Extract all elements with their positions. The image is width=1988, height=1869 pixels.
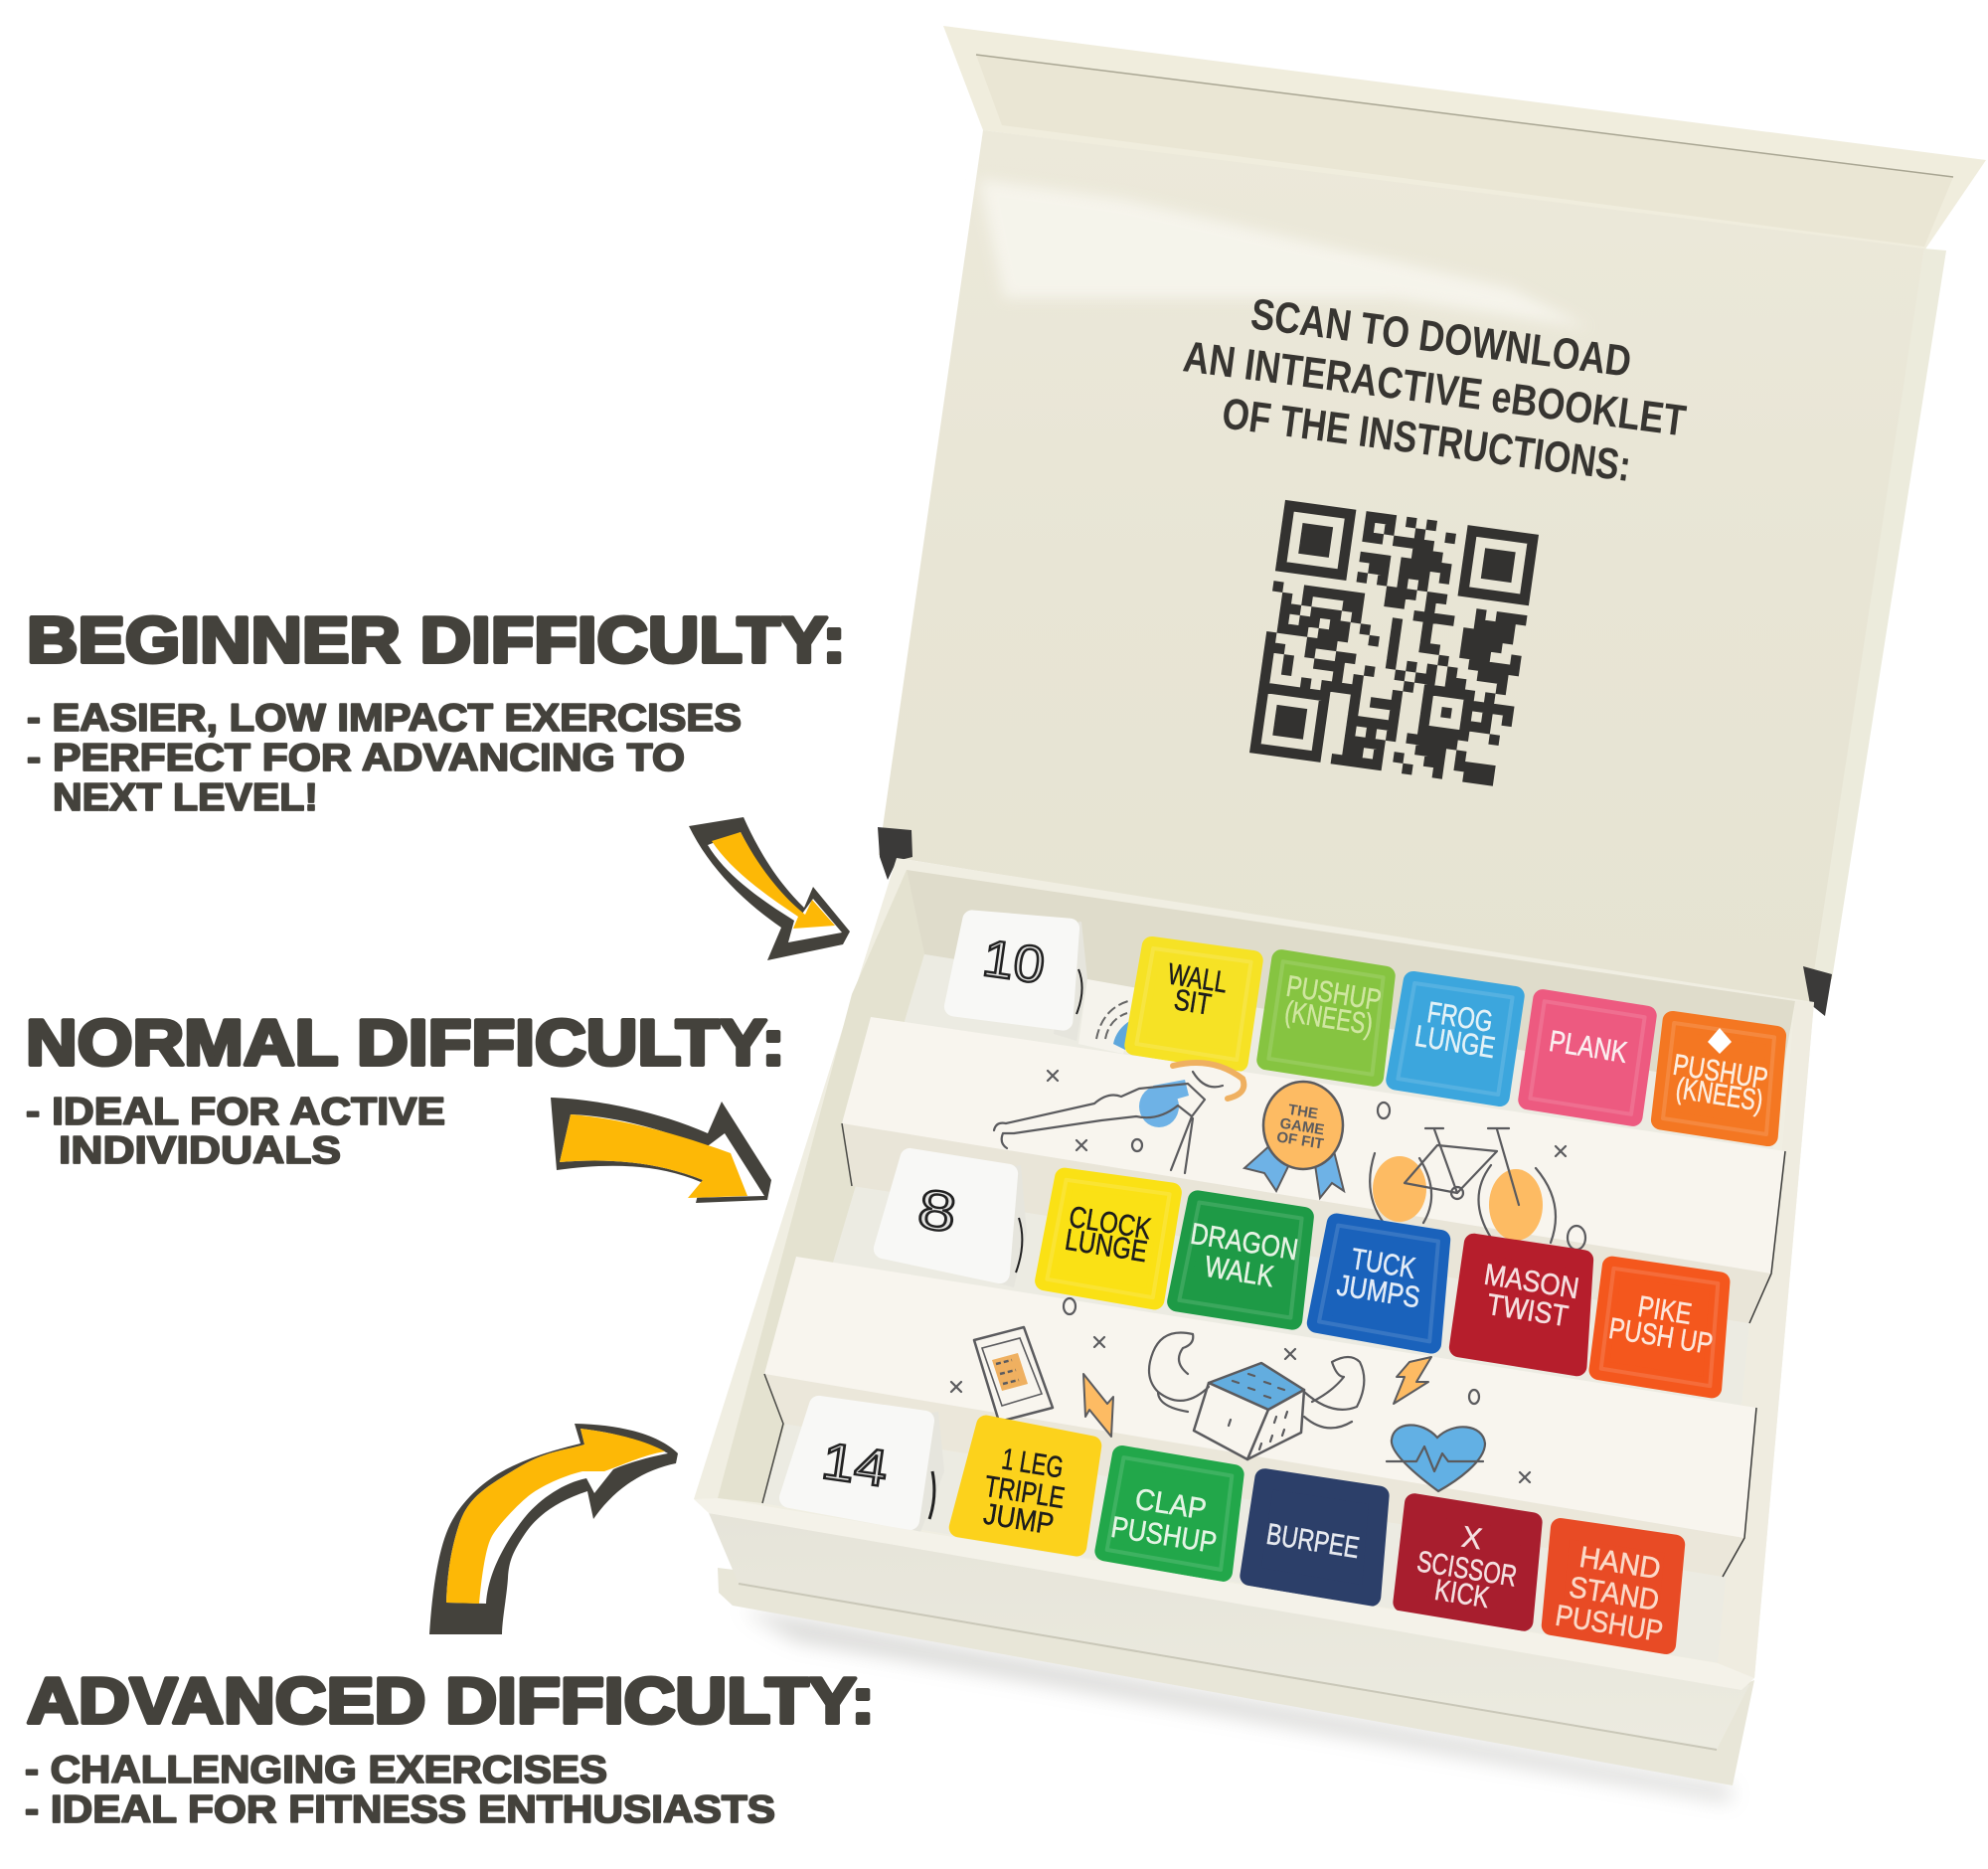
text block: beginner details [27,697,742,819]
lid right edge strip [1807,249,1946,979]
die: white 14: 14 [818,1433,892,1498]
die: 1 leg triple jump: 1 LEG [1000,1443,1066,1485]
die: clap pushup: CLAP [1133,1483,1209,1526]
die: x scissor kick: KICK [1432,1574,1492,1614]
die: 1 leg triple jump: TRIPLE [982,1470,1067,1515]
die: hand stand pushup: PUSHUP [1553,1600,1665,1648]
die: pushup knees green: (KNEES) [1282,995,1375,1042]
die: pushup knees orange: (KNEES) [1674,1072,1765,1118]
die: clock lunge: CLOCK [1067,1201,1153,1246]
icon: lightning bolt left [1083,1374,1113,1437]
die: white 10: 10 [979,930,1049,995]
die: pushup knees orange [1661,1021,1776,1136]
die: white 8 [884,1158,1027,1287]
band 2 decorations [951,1298,1530,1482]
callout: advanced heading: ADVANCED DIFFICULTY: [27,1664,875,1737]
lid hinge corner: left [878,827,912,880]
die: wall sit: WALL [1166,957,1230,999]
die: clap pushup [1104,1455,1235,1572]
divider band 2 [762,1257,1756,1577]
lid panel [879,26,1986,1004]
text block: beginner details: - PERFECT FOR ADVANCING TO [27,737,685,779]
QR code [1250,505,1538,782]
die: tuck jumps [1317,1223,1440,1344]
die: pike push up [1598,1267,1721,1388]
tray left wall [718,870,924,1503]
box tray [694,858,1814,1678]
tray rim [694,858,1814,1678]
band 1 decorations [1048,1071,1566,1156]
text block: normal details [26,1091,445,1172]
divider band 1 [842,1017,1785,1323]
tray floor [762,954,1779,1663]
text block: normal details: INDIVIDUALS [59,1129,341,1172]
card peek behind row 1 [1078,979,1143,1054]
die: white 14 [789,1406,944,1532]
die: mason twist [1459,1244,1583,1366]
text block: beginner details: NEXT LEVEL! [53,776,318,819]
die: wall sit: SIT [1172,983,1214,1022]
die: pushup knees orange: PUSHUP [1671,1049,1770,1096]
band 1 lower fold [842,1123,1771,1323]
icon: rosette badge [1244,1082,1344,1198]
die: frog lunge: FROG [1425,996,1495,1039]
die: burpee: BURPEE [1264,1518,1362,1565]
die: white 10 [954,920,1087,1041]
dice row 2: normal [1045,1178,1721,1388]
lid top flap [943,26,1986,251]
text block: advanced details [25,1749,775,1831]
die: tuck jumps: TUCK [1349,1243,1417,1285]
die: tuck jumps: JUMPS [1335,1270,1422,1314]
die: frog lunge [1396,981,1515,1097]
icon: rosette badge: THE [1287,1102,1319,1122]
die: hand stand pushup [1552,1528,1675,1648]
lid inner face [879,130,1924,1004]
callout: normal heading: NORMAL DIFFICULTY: [26,1006,785,1079]
die: hand stand pushup: HAND [1577,1541,1663,1586]
text block: advanced details: - CHALLENGING EXERCISES [25,1749,607,1791]
icon: muscle dice [1149,1332,1364,1459]
die: pike push up: PIKE [1636,1290,1694,1331]
arrow: advanced [429,1424,678,1634]
tray right wall [1718,1001,1814,1678]
lid hinge corner: right [1803,966,1832,1016]
die: clap pushup: PUSHUP [1108,1511,1219,1560]
icon: plank figure [994,1063,1243,1173]
icon: heart [1387,1425,1485,1491]
dice row 1: beginner [1134,946,1776,1136]
die: 1 leg triple jump [959,1425,1091,1547]
dice row 3: advanced [959,1425,1675,1648]
die: dragon walk: WALK [1203,1251,1276,1293]
die: white 8: 8 [914,1177,960,1244]
die: pike push up: PUSH UP [1606,1312,1715,1361]
die: burpee [1249,1478,1380,1597]
box base plate [718,1568,1754,1785]
die: plank: PLANK [1547,1025,1629,1070]
die: hand stand pushup: STAND [1567,1571,1661,1617]
die: pushup knees green: PUSHUP [1284,970,1384,1017]
instruction text: AN INTERACTIVE eBOOKLET [1181,332,1689,445]
die: x scissor kick: SCISSOR [1414,1545,1519,1594]
instruction text: OF THE INSTRUCTIONS: [1220,389,1634,491]
arrow: normal [551,1098,771,1203]
die: dragon walk: DRAGON [1188,1218,1300,1267]
die: pushup knees green [1266,959,1386,1077]
die: dragon walk [1177,1200,1304,1320]
die: 1 leg triple jump: JUMP [981,1498,1056,1541]
lid gloss highlight [979,179,1590,328]
die: mason twist: TWIST [1485,1288,1571,1333]
box front wall [694,1498,1754,1750]
die: x scissor kick: X [1459,1521,1484,1556]
icon: bicycle [1370,1128,1556,1243]
die: x scissor kick [1403,1503,1533,1621]
die: frog lunge: LUNGE [1412,1020,1497,1065]
text block: beginner details: - EASIER, LOW IMPACT EXERCISES [27,697,742,740]
text block: normal details: - IDEAL FOR ACTIVE [26,1091,445,1133]
box shadow [741,1609,1731,1801]
instruction text [1181,289,1689,491]
callout: beginner heading: BEGINNER DIFFICULTY: [27,603,846,676]
die: plank [1528,999,1647,1116]
die: mason twist: MASON [1482,1259,1581,1305]
tray back wall [907,870,1795,1092]
band 2 lower fold [764,1374,1744,1577]
die: wall sit [1134,946,1253,1062]
text block: advanced details: - IDEAL FOR FITNESS ENTHUSIASTS [25,1788,775,1831]
icon: rosette badge: OF FIT [1275,1128,1325,1153]
die: clock lunge [1045,1178,1172,1299]
icon: phone with qr [974,1327,1053,1422]
instruction text: SCAN TO DOWNLOAD [1248,289,1634,387]
die: clock lunge: LUNGE [1063,1224,1149,1269]
arrow: beginner [689,817,850,960]
icon: lightning bolt right [1394,1357,1431,1404]
icon: rosette badge: GAME [1278,1115,1325,1138]
